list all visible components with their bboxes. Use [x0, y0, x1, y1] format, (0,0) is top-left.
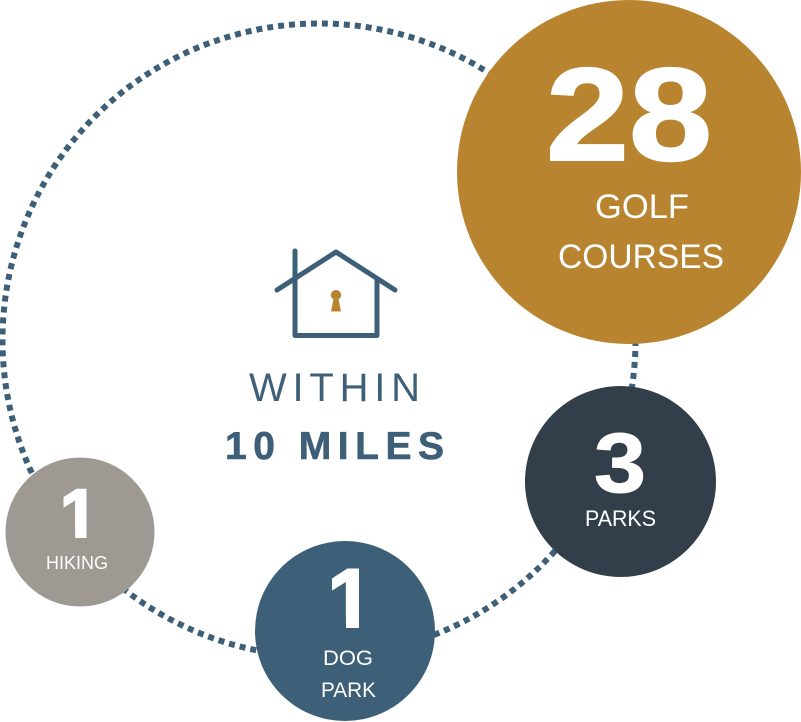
icon: keyhole — [331, 290, 341, 312]
icon: house with keyhole — [277, 251, 395, 336]
panel: hiking — [6, 458, 154, 606]
heading: within 10 miles: WITHIN — [249, 366, 420, 410]
panel: dog park — [255, 541, 435, 721]
number: 1: 1 — [328, 552, 374, 646]
number: 3: 3 — [594, 416, 646, 510]
label: golf courses: COURSES — [558, 238, 724, 276]
label: dog park: DOG — [323, 647, 373, 670]
label: golf courses — [558, 188, 724, 276]
heading: within 10 miles: 10 MILES — [225, 425, 444, 468]
number: 1: 1 — [60, 475, 99, 553]
label: hiking: HIKING — [46, 553, 108, 573]
label: dog park — [321, 647, 376, 702]
label: dog park: PARK — [321, 679, 376, 702]
label: parks: PARKS — [585, 506, 656, 531]
number: 28: 28 — [546, 41, 712, 188]
dotted 10-mile radius ring — [2, 24, 636, 656]
label: golf courses: GOLF — [595, 188, 689, 226]
heading: within 10 miles — [225, 366, 444, 468]
panel: golf courses — [457, 0, 801, 344]
panel: parks — [525, 386, 716, 577]
